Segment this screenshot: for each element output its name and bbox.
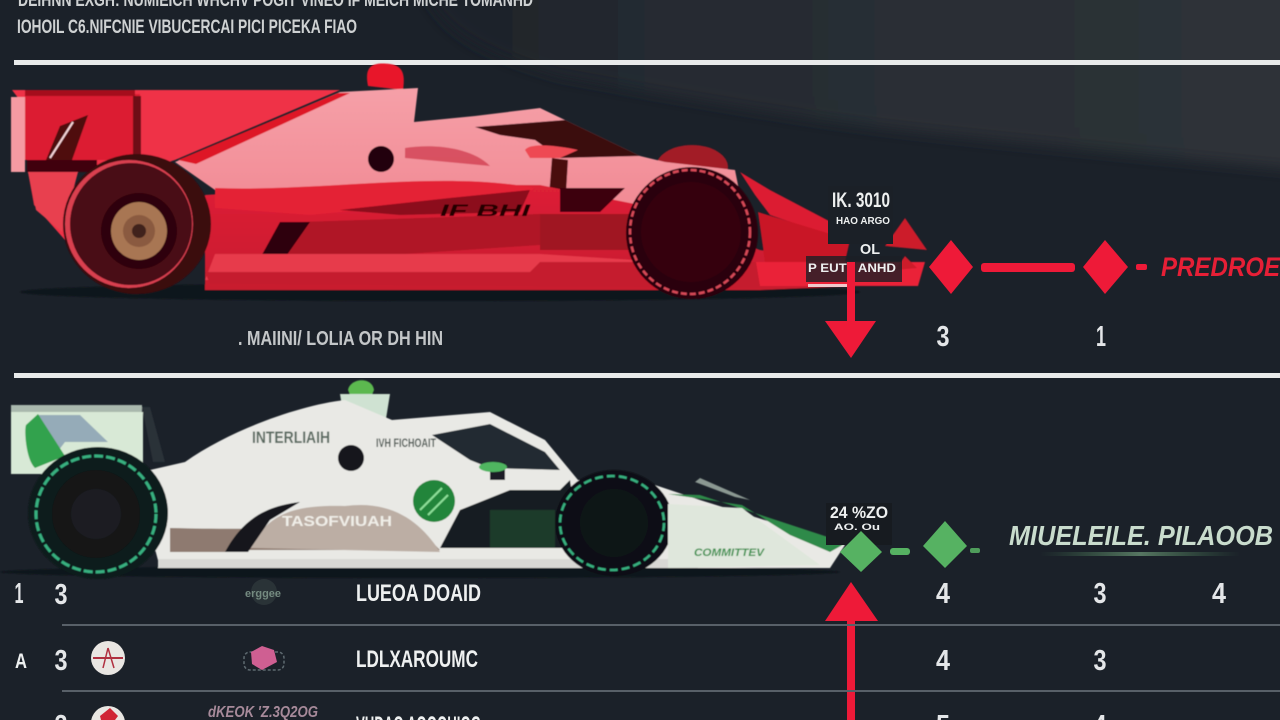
row 2: 3: [1094, 645, 1106, 677]
red row values: 1: [1096, 321, 1106, 353]
nose callout: green: [826, 503, 892, 545]
airbox: [367, 64, 404, 90]
divider: top: [14, 60, 1280, 65]
nose callout: green: 24 %ZO: [830, 503, 888, 522]
green car: IVH FICHOAIT: [376, 436, 437, 450]
badge icon: [91, 706, 125, 720]
row 1: 1: [14, 578, 24, 610]
nose callout: red: [806, 186, 902, 287]
nose callout: red: HAO ARGO: [836, 216, 890, 227]
row 1: 4: [936, 578, 950, 610]
row 1: 3: [54, 579, 68, 611]
row 2: A: [15, 650, 27, 673]
row 3: [54, 704, 1106, 720]
rear wheel: [63, 154, 211, 294]
row 2: 3: [54, 645, 68, 677]
divider: middle: [14, 373, 1280, 378]
table: [14, 578, 1280, 720]
green car: COMMITTEV: [694, 547, 766, 559]
front wheel: [555, 470, 673, 576]
cockpit: [475, 120, 640, 158]
nose callout: green: AO. Ou: [834, 522, 880, 532]
header text block: [17, 0, 533, 38]
red row values: . MAIINI/ LOLIA OR DH HIN: [238, 328, 443, 350]
row 1: 4: [1212, 578, 1226, 610]
sidepod: [205, 185, 880, 290]
nose: [740, 172, 850, 240]
front wheel dome: [656, 145, 728, 189]
row 2: LDLXAROUMC: [356, 646, 478, 673]
nose callout: red: IK. 3010: [832, 189, 890, 212]
red legend: diamonds and label: [929, 240, 1280, 294]
row 2: 4: [936, 645, 950, 677]
red car: IF BHI: [440, 201, 532, 220]
row 1: 3: [1094, 578, 1106, 610]
green legend: diamonds and label: [840, 520, 1273, 572]
team logo 2: [244, 646, 284, 670]
team logo 1: [245, 579, 281, 605]
green car: INTERLIAIH: [252, 428, 330, 447]
team logo 1: erggee: [245, 588, 281, 600]
sidepod: [170, 524, 440, 552]
red arrow down: [825, 262, 876, 358]
rear wheel: [28, 447, 168, 579]
row 1: [14, 578, 1226, 611]
red arrow up: [825, 582, 878, 720]
body: [150, 400, 845, 568]
header text block: IOHOIL C6.NIFCNIE VIBUCERCAI PICI PICEKA FIAO: [17, 17, 357, 38]
shadow: [20, 283, 860, 301]
row 1: LUEOA DOAID: [356, 580, 481, 607]
red car: [11, 64, 927, 301]
wing: [11, 90, 340, 240]
nose callout: red: P EUTL ANHD: [808, 261, 896, 275]
red row values: 3: [936, 321, 950, 353]
badge icon: [91, 641, 125, 675]
green car: [0, 380, 846, 579]
red row values: [238, 321, 1106, 353]
row 2: [15, 641, 1106, 677]
nose callout: red: OL: [860, 241, 880, 258]
cockpit: [432, 424, 560, 470]
intake: [368, 146, 394, 172]
wing: [11, 405, 165, 474]
front wheel: [626, 167, 758, 299]
green car: TASOFVIUAH: [282, 513, 392, 530]
airbox: [348, 380, 374, 395]
nose: [668, 494, 846, 552]
shadow: [0, 566, 840, 578]
upper body: [175, 88, 740, 210]
